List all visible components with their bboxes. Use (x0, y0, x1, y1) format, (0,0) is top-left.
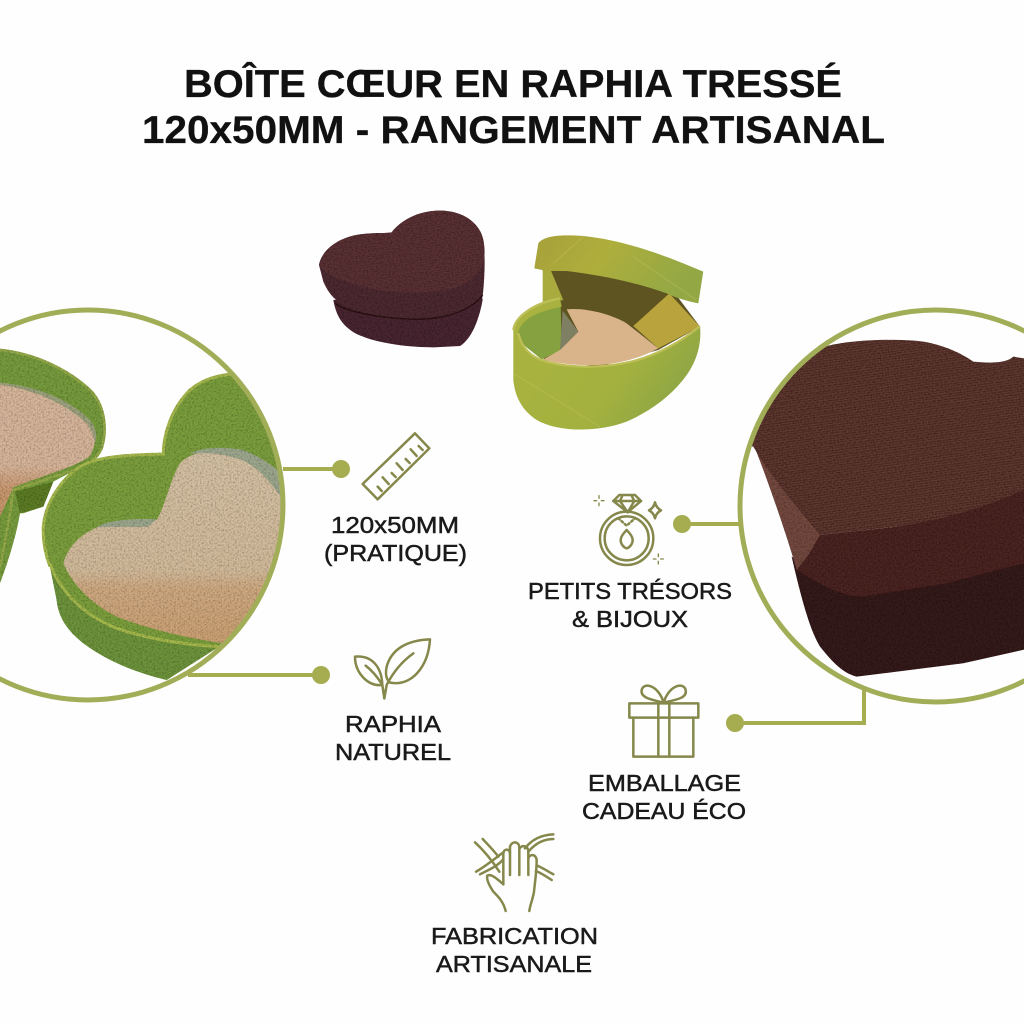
label: raffia: RAPHIA (345, 711, 442, 737)
label: size: (PRATIQUE) (324, 540, 467, 566)
icon: gift box (629, 686, 698, 757)
label: handmade (431, 923, 598, 977)
zoom circle right: brown box close-up (737, 310, 1024, 702)
ring frame (740, 310, 1024, 702)
label: gift (582, 770, 746, 824)
connector: gift (726, 690, 864, 732)
product photo: closed brown heart box (319, 211, 485, 347)
product photo: open green heart box (513, 235, 703, 430)
label: raffia (335, 711, 451, 765)
label: treasures (528, 578, 732, 632)
title (142, 62, 885, 152)
main box (43, 374, 300, 680)
left partial box (0, 350, 105, 583)
zoom circle left: interior of green box (0, 310, 300, 700)
title: BOÎTE CŒUR EN RAPHIA TRESSÉ (184, 62, 842, 106)
icon: ring with jewel (594, 495, 663, 565)
label: handmade: FABRICATION (431, 923, 598, 949)
label: raffia: NATUREL (335, 739, 451, 765)
icon: hand weaving (475, 834, 553, 911)
icon: leaves (355, 639, 430, 698)
label: handmade: ARTISANALE (436, 951, 592, 977)
connector: dimensions (283, 460, 350, 478)
icon: ruler (363, 433, 429, 499)
label: treasures: & BIJOUX (572, 606, 688, 632)
ring frame (0, 310, 283, 700)
label: gift: CADEAU ÉCO (582, 798, 746, 824)
label: size: 120x50MM (331, 512, 459, 538)
connector: raffia (188, 666, 330, 684)
title: 120x50MM - RANGEMENT ARTISANAL (142, 109, 885, 152)
connector: treasures (673, 515, 743, 533)
label: treasures: PETITS TRÉSORS (528, 578, 732, 604)
label: size (324, 512, 467, 566)
label: gift: EMBALLAGE (588, 770, 741, 796)
